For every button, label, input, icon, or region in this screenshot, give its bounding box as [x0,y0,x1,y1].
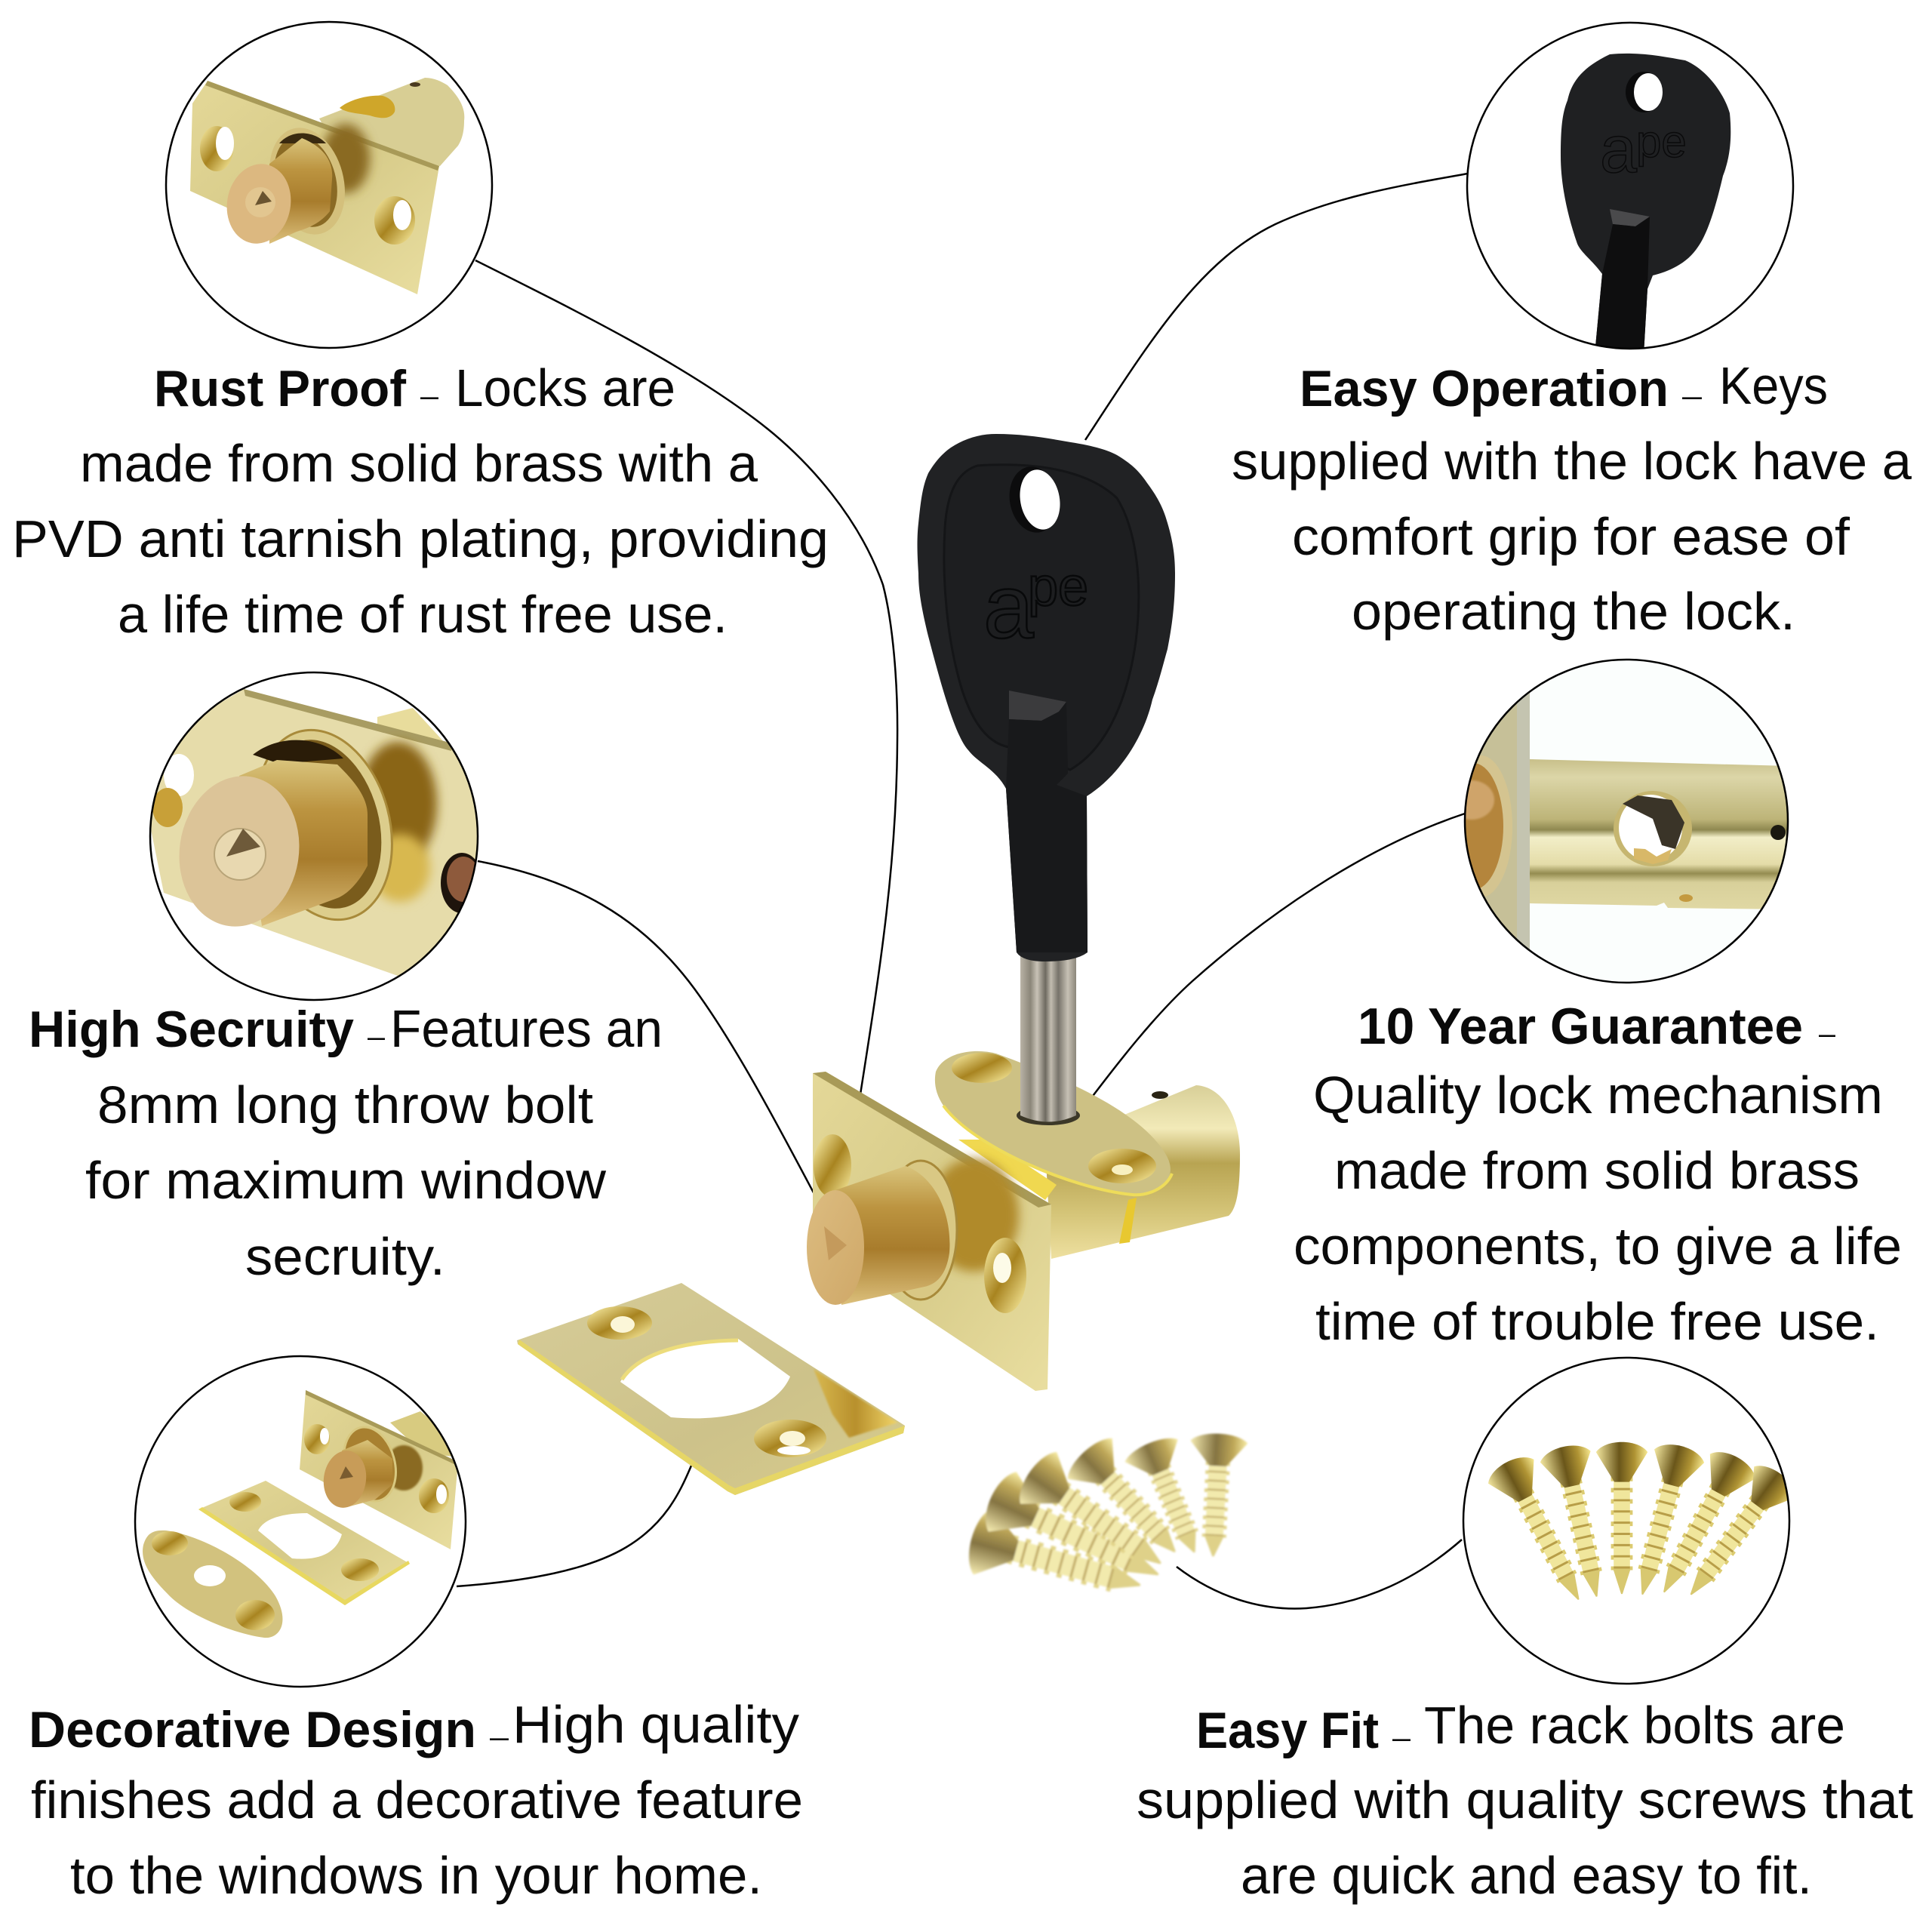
text: easy operation: Easy Operation [1300,360,1669,417]
connector: high security to bolt [478,861,816,1197]
text: easy operation: – [1682,380,1703,413]
circle outline [1465,660,1788,983]
text: easy fit: Easy Fit [1196,1702,1379,1759]
shaft hole [1017,1106,1080,1125]
connector: guarantee to mechanism [1086,814,1465,1105]
circle image: six screws [1488,1441,1787,1600]
circle outline [166,22,492,348]
circle outline [1463,1358,1789,1684]
strike plate bright edge [518,1340,905,1495]
strike plate sinks [587,1306,826,1457]
text: ten year guarantee: components, to give a life [1294,1217,1902,1275]
plate shadow [928,1158,1019,1272]
text: easy fit: The rack bolts are [1424,1696,1845,1755]
text: high security [29,999,663,1286]
connector: easy fit to screws [1177,1540,1462,1609]
text: easy operation: Keys [1719,356,1828,415]
panel: ten year guarantee [1294,649,1902,1351]
text: easy fit: supplied with quality screws that [1137,1770,1913,1829]
face plate [813,1072,1051,1391]
text: high security: for maximum window [85,1151,606,1210]
text: rust proof: a life time of rust free use. [118,585,728,644]
text: high security: 8mm long throw bolt [97,1075,593,1134]
circle image: key close up: a [1600,112,1637,186]
key stem notch [1009,691,1066,721]
oval cover plate [935,1051,1171,1195]
panel: rust proof [12,22,829,644]
text: easy fit: are quick and easy to fit. [1241,1846,1812,1905]
product: strike plate [517,1283,905,1495]
text: decorative design: to the windows in your home. [70,1846,762,1905]
bolt rear cylinder [1045,1085,1240,1259]
circle image: bolt close up [190,78,464,294]
text: rust proof [12,358,829,644]
text: decorative design [29,1695,803,1905]
text: rust proof: made from solid brass with a [80,434,758,493]
circle image: lock mechanism [1466,693,1787,949]
key inner recess [944,465,1139,770]
key metal shaft [1020,951,1076,1124]
circle outline [135,1356,466,1687]
text: ten year guarantee: Quality lock mechanism [1313,1066,1883,1124]
key shaft front [1020,981,1076,1121]
strike hole rim [622,1340,738,1380]
text: decorative design: Decorative Design [29,1701,476,1758]
key stem front [1006,702,1088,952]
text: easy operation: comfort grip for ease of [1292,507,1850,566]
text: high security: secruity. [245,1227,445,1286]
text: high security: High Secruity [29,1001,354,1058]
bolt barrel [835,1166,949,1305]
plate right screw hole [984,1238,1026,1313]
text: ten year guarantee: – [1819,1017,1836,1051]
bright slot [1119,1198,1137,1244]
plate left screw hole [814,1134,851,1198]
face plate edge [813,1072,1051,1208]
strike plate reflection [814,1369,897,1438]
text: rust proof: Locks are [455,358,675,417]
text: rust proof: PVD anti tarnish plating, providing [12,509,829,568]
bolt collar [884,1161,957,1300]
connector: decorative design to strike plate [457,1466,691,1586]
product: rack bolt [807,981,1240,1391]
text: easy operation: supplied with the lock have a [1232,432,1912,491]
product: key [918,434,1175,1124]
cover plate sinks [952,1053,1156,1183]
key logo: a [983,556,1034,657]
bolt end face [807,1190,864,1305]
text: easy fit [1137,1696,1913,1905]
product: loose screws [962,1432,1248,1618]
panel: high security [29,672,663,1286]
circle image: key close up: pe [1636,116,1687,167]
circle image: all brass parts [143,1390,458,1638]
text: decorative design: – [490,1721,509,1754]
panel: easy operation [1232,23,1912,641]
connector: easy operation to key [1085,174,1468,440]
text: ten year guarantee: 10 Year Guarantee [1358,998,1803,1055]
cover plate lower edge [943,1106,1172,1195]
text: easy operation [1232,356,1912,641]
text: ten year guarantee [1294,998,1902,1351]
text: decorative design: High quality [512,1695,799,1754]
panel: easy fit [1137,1358,1913,1905]
text: easy fit: – [1392,1721,1411,1755]
key logo: pe [1028,557,1088,617]
circle image: key close up [1561,54,1730,355]
circle image: bolt end detail [151,689,477,976]
text: rust proof: Rust Proof [154,360,406,417]
rear cylinder side hole [1152,1091,1168,1099]
connector: rust proof to lock plate [475,260,897,1094]
text: high security: – [368,1020,386,1054]
key grip [918,434,1175,961]
circle outline [150,672,478,1000]
panel: decorative design [29,1356,803,1905]
key ring hole [1004,463,1065,537]
text: rust proof: – [420,380,439,413]
circle outline [1467,23,1793,349]
text: ten year guarantee: made from solid brass [1334,1141,1860,1200]
text: easy operation: operating the lock. [1352,582,1795,641]
bolt end face mark [824,1226,847,1260]
text: ten year guarantee: time of trouble free use. [1315,1292,1879,1351]
key logo [983,556,1088,657]
body top glint [958,1140,1057,1200]
text: high security: Features an [390,999,663,1058]
text: decorative design: finishes add a decorative feature [31,1770,803,1829]
